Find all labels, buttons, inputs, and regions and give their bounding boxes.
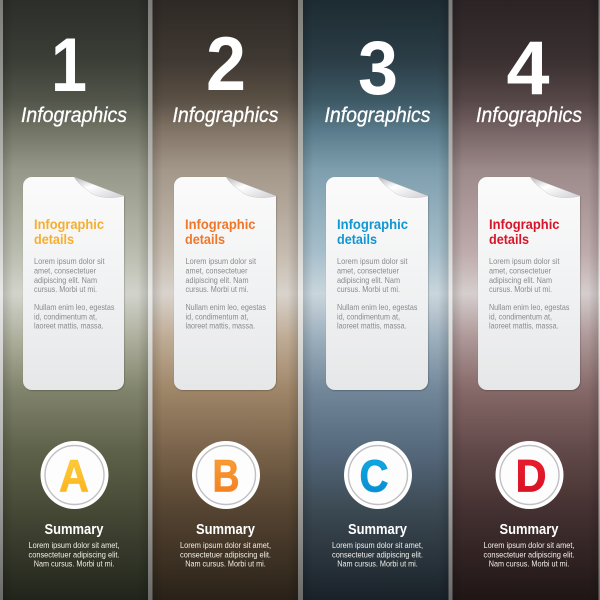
card text: laoreet mattis, massa. (337, 320, 406, 330)
summary: Lorem ipsum dolor sit amet, (28, 540, 120, 550)
card text: amet, consectetuer (489, 266, 551, 276)
summary: Summary (500, 522, 558, 538)
badge D: D (516, 450, 546, 502)
badge A (40, 441, 108, 509)
icon: page curl (530, 177, 580, 198)
panel: column 1 (3, 0, 148, 600)
card text: cursus. Morbi ut mi. (34, 284, 97, 294)
summary: Summary (348, 522, 407, 538)
card heading: Infographic (337, 216, 408, 232)
card: details A (23, 177, 124, 390)
summary (180, 522, 271, 568)
card heading: Infographic (185, 216, 256, 232)
badge A: A (59, 450, 89, 502)
icon: page curl (378, 177, 428, 198)
card text: id, condimentum at, (337, 312, 400, 322)
summary: consectetuer adipiscing elit. (332, 550, 423, 560)
summary: consectetuer adipiscing elit. (484, 550, 574, 560)
card text: cursus. Morbi ut mi. (186, 284, 248, 294)
card: details D (478, 177, 580, 390)
number 3: 3 (358, 26, 398, 111)
card text: amet, consectetuer (34, 266, 96, 276)
card text: amet, consectetuer (186, 266, 248, 276)
card text: amet, consectetuer (337, 266, 399, 276)
card text: Nullam enim leo, egestas (489, 302, 570, 312)
card: details C (326, 177, 428, 390)
badge B: B (212, 450, 240, 502)
card text: Lorem ipsum dolor sit (489, 256, 560, 266)
card text: laoreet mattis, massa. (34, 320, 104, 330)
card heading: details (489, 231, 529, 247)
heading: Infographics: Infographics (172, 104, 279, 127)
card text: adipiscing elit. Nam (337, 275, 400, 285)
heading: Infographics: Infographics (324, 104, 431, 127)
card text: cursus. Morbi ut mi. (489, 284, 552, 294)
card text: laoreet mattis, massa. (186, 320, 255, 330)
heading: Infographics: Infographics (476, 104, 582, 127)
summary: Lorem ipsum dolor sit amet, (332, 540, 423, 550)
panel: column 3 (303, 0, 448, 600)
panel: column 4 (452, 0, 598, 600)
badge D (496, 441, 564, 509)
summary: Nam cursus. Morbi ut mi. (337, 558, 418, 568)
summary: Lorem ipsum dolor sit amet, (484, 540, 574, 550)
summary: Nam cursus. Morbi ut mi. (185, 558, 266, 568)
card text: Nullam enim leo, egestas (337, 302, 418, 312)
card text: adipiscing elit. Nam (34, 275, 97, 285)
panel: column 2 (152, 0, 298, 600)
summary (484, 522, 574, 568)
icon: page curl (74, 177, 124, 198)
badge C (344, 441, 412, 509)
summary (28, 522, 120, 568)
card text: Lorem ipsum dolor sit (337, 256, 408, 266)
card: details B (174, 177, 276, 390)
card text: cursus. Morbi ut mi. (337, 284, 400, 294)
card text: id, condimentum at, (489, 312, 552, 322)
badge C: C (360, 450, 388, 502)
summary (332, 522, 423, 568)
summary: consectetuer adipiscing elit. (28, 550, 120, 560)
card heading: details (337, 231, 377, 247)
badge B (192, 441, 260, 509)
number 2: 2 (206, 22, 246, 107)
number 4: 4 (506, 26, 550, 111)
card text: adipiscing elit. Nam (489, 275, 552, 285)
summary: consectetuer adipiscing elit. (180, 550, 271, 560)
summary: Nam cursus. Morbi ut mi. (34, 558, 114, 568)
card heading: details (185, 231, 225, 247)
summary: Nam cursus. Morbi ut mi. (489, 558, 569, 568)
card heading: Infographic (489, 216, 560, 232)
card text: Lorem ipsum dolor sit (186, 256, 256, 266)
summary: Summary (44, 522, 104, 538)
heading: Infographics: Infographics (21, 104, 127, 127)
card heading: details (34, 231, 74, 247)
card heading: Infographic (34, 216, 104, 232)
number 1: 1 (51, 23, 87, 108)
card text: Nullam enim leo, egestas (186, 302, 267, 312)
summary: Summary (196, 522, 255, 538)
card text: Lorem ipsum dolor sit (34, 256, 105, 266)
card text: id, condimentum at, (34, 312, 97, 322)
summary: Lorem ipsum dolor sit amet, (180, 540, 271, 550)
card text: id, condimentum at, (186, 312, 248, 322)
icon: page curl (226, 177, 276, 198)
card text: adipiscing elit. Nam (186, 275, 248, 285)
card text: Nullam enim leo, egestas (34, 302, 115, 312)
card text: laoreet mattis, massa. (489, 320, 558, 330)
